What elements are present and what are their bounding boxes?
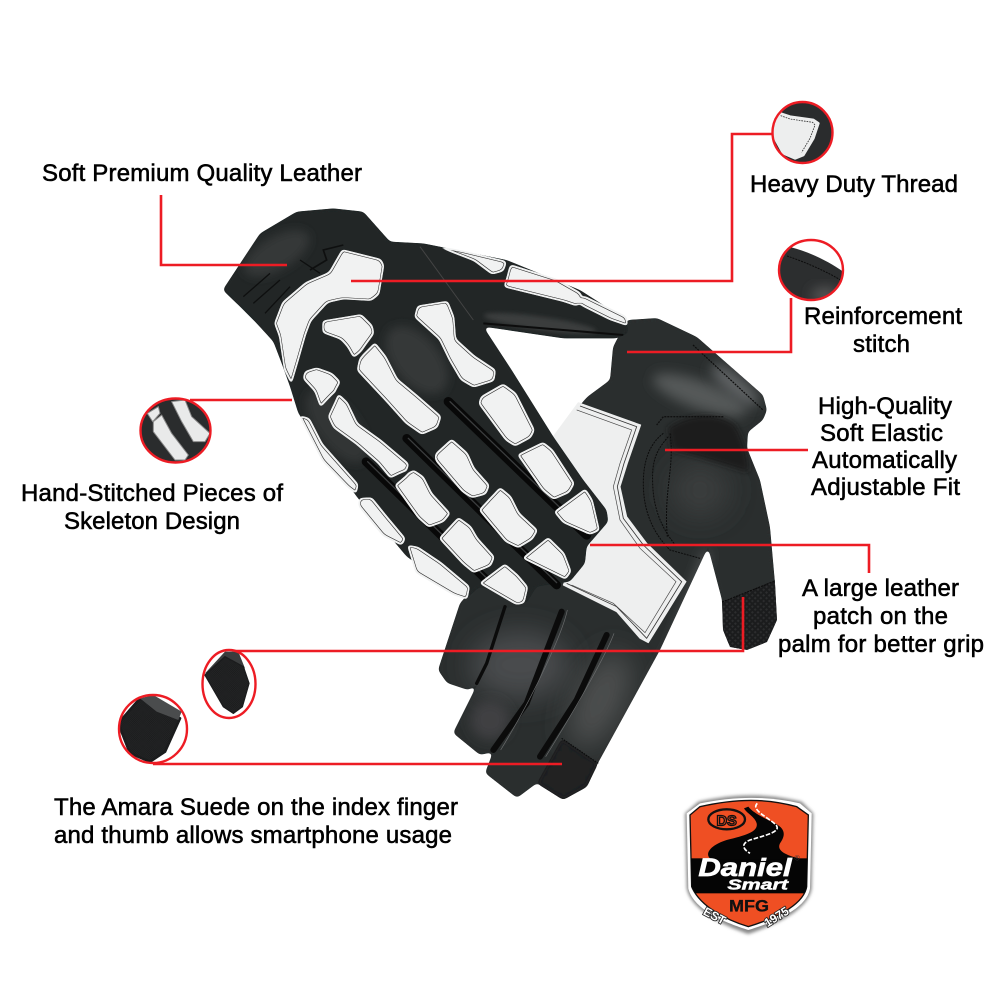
label: skeleton design: [21, 480, 283, 535]
label: skeleton design: Hand-Stitched Pieces of: [21, 480, 283, 507]
finger slots: [366, 402, 587, 587]
label: amara suede: The Amara Suede on the index finger: [54, 794, 458, 821]
glove: back of hand with skeleton bones: [223, 208, 629, 606]
label: reinforcement stitch: Reinforcement: [804, 303, 962, 330]
logo est badge: 1975: [762, 904, 792, 930]
logo: Daniel Smart MFG shield: Daniel: [698, 855, 793, 882]
thumb tip suede: [722, 580, 777, 650]
label: elastic fit: Adjustable Fit: [811, 474, 960, 501]
label: soft premium leather: Soft Premium Quality Leather: [42, 160, 362, 187]
callout line: index suede: [153, 763, 562, 765]
label: leather palm patch: patch on the: [813, 603, 948, 630]
inset: index finger suede: [118, 695, 187, 763]
logo: Daniel Smart MFG shield: [685, 795, 813, 934]
label: leather palm patch: [778, 575, 984, 658]
logo: Daniel Smart MFG shield: Smart: [727, 877, 790, 893]
callout line: skeleton design: [190, 399, 292, 401]
label: reinforcement stitch: [804, 303, 962, 358]
callout line: elastic fit: [665, 449, 808, 451]
label: skeleton design: Skeleton Design: [64, 508, 240, 535]
label: elastic fit: Soft Elastic: [820, 420, 943, 447]
label: amara suede: and thumb allows smartphone usage: [54, 822, 452, 849]
palm stitching: [643, 433, 700, 558]
callout line: palm patch: [590, 545, 869, 573]
inset: heavy duty thread: [770, 102, 832, 163]
label: leather palm patch: palm for better grip: [778, 631, 984, 658]
label: reinforcement stitch: stitch: [853, 331, 910, 358]
label: heavy duty thread: Heavy Duty Thread: [750, 171, 958, 198]
glove: palm view: [438, 318, 779, 800]
label: leather palm patch: A large leather: [802, 575, 959, 602]
inset: skeleton stitched pieces: [140, 398, 210, 462]
inset: reinforcement stitch: [775, 240, 845, 305]
logo: Daniel Smart MFG shield: ®: [794, 854, 800, 863]
thumb-base seam: [693, 345, 763, 410]
label: elastic fit: Automatically: [812, 447, 957, 474]
logo est badge: EST: [701, 904, 729, 928]
callout line: heavy duty thread: [351, 134, 772, 281]
logo road: [708, 807, 803, 859]
callout line: thumb suede: [230, 597, 743, 651]
callout line: reinforcement stitch: [627, 298, 791, 352]
logo est badge: [701, 904, 792, 930]
white palm patch: [477, 403, 723, 800]
logo: Daniel Smart MFG shield: MFG: [729, 896, 769, 915]
skeleton bones: [273, 242, 629, 606]
callout line: soft leather: [161, 195, 287, 265]
inset: thumb suede: [202, 650, 256, 718]
label: amara suede: [54, 794, 458, 849]
finger slots: [477, 607, 607, 757]
label: elastic fit: [811, 393, 960, 501]
logo DS emblem: DS: [716, 813, 737, 829]
label: elastic fit: High-Quality: [818, 393, 952, 420]
index finger tip suede: [537, 738, 598, 800]
